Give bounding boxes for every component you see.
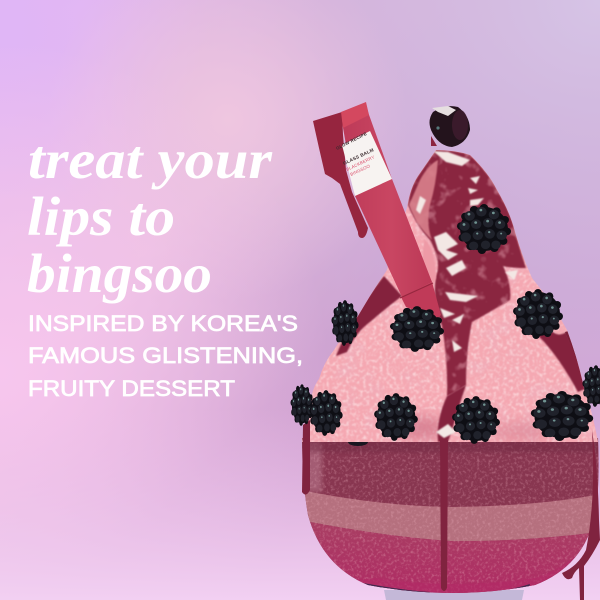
syrup right streak	[539, 331, 584, 393]
heading: treat your	[28, 129, 273, 190]
label: BLACKBERRY	[345, 154, 375, 172]
label: GLASS BALM	[342, 147, 375, 166]
subheading	[28, 311, 303, 401]
syrup left streak	[336, 276, 402, 356]
subheading: FRUITY DESSERT	[28, 376, 235, 401]
lip balm tube	[313, 102, 441, 319]
heading: bingsoo	[27, 243, 212, 304]
syrup centre streak	[438, 385, 466, 442]
heading	[27, 129, 273, 304]
syrup drip over cap	[313, 112, 368, 238]
glass bowl of shaved ice	[300, 436, 600, 600]
syrup pale left streak	[409, 160, 438, 240]
berry: top, glazed	[430, 106, 470, 147]
syrup on the peak	[408, 150, 526, 396]
pale ice patch beside tube	[422, 238, 437, 286]
bowl foot	[384, 590, 524, 600]
small berry seen through glass	[348, 438, 368, 446]
heading: lips to	[27, 186, 175, 247]
white glaze flecks	[416, 151, 518, 438]
bowl layered contents	[300, 436, 600, 600]
subheading: INSPIRED BY KOREA'S	[28, 311, 298, 336]
label	[335, 131, 392, 196]
tube body	[342, 112, 432, 297]
tube collar	[401, 282, 441, 319]
syrup drips on bowl	[302, 420, 600, 600]
blackberries	[291, 106, 600, 444]
label: GLOW RECIPE	[335, 131, 368, 151]
label: BINGSOO	[349, 163, 371, 177]
shaved ice mound	[300, 140, 600, 445]
subheading: FAMOUS GLISTENING,	[28, 343, 303, 368]
cap	[341, 102, 369, 128]
